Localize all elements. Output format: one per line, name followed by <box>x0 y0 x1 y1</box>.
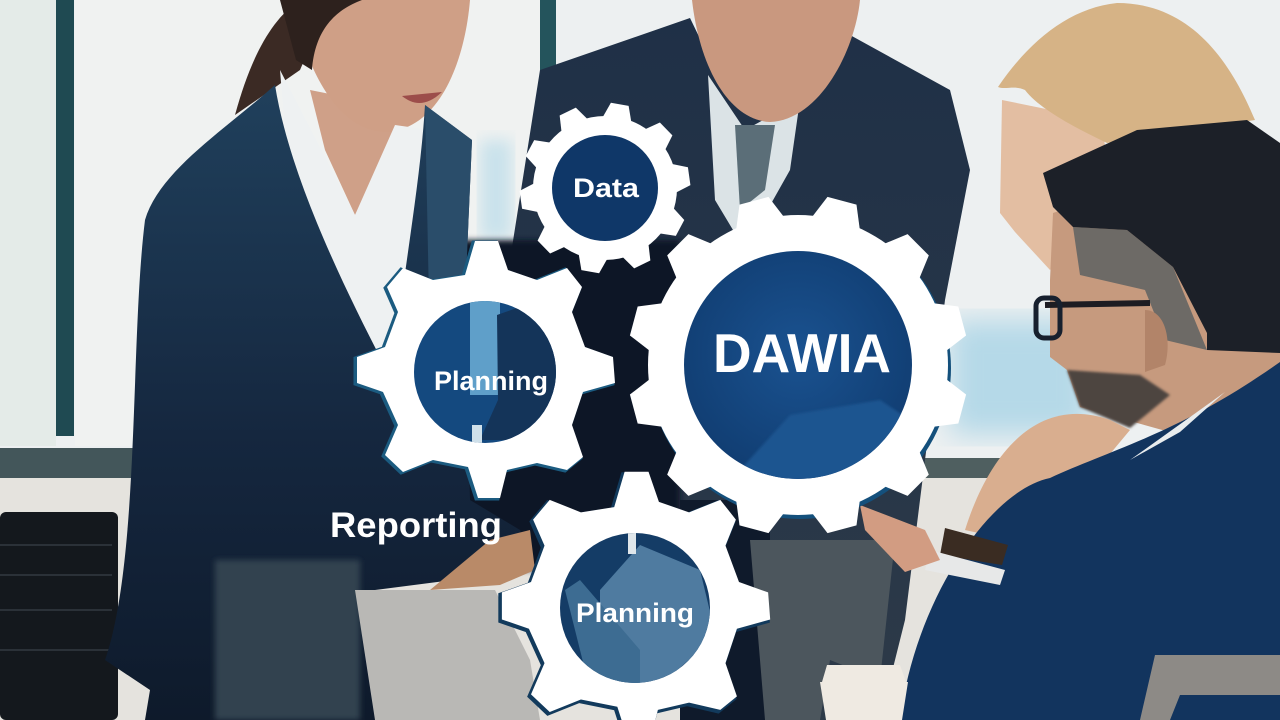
gear: large DAWIA <box>627 194 969 536</box>
laptop <box>355 590 540 720</box>
chair right <box>1140 655 1280 720</box>
person: woman on left <box>105 0 535 720</box>
gear: Planning (bottom) <box>500 472 770 720</box>
label: DAWIA: DAWIA <box>713 322 891 384</box>
label: Planning: Planning <box>576 598 694 628</box>
person: man in centre <box>460 0 970 720</box>
chair left <box>0 512 118 720</box>
gear: Planning (middle) <box>355 241 615 499</box>
person: blonde woman on right <box>998 3 1255 270</box>
coffee cup <box>820 665 908 720</box>
label: Planning: Planning <box>434 366 548 396</box>
person: man in front <box>860 120 1280 720</box>
label: Data: Data <box>573 173 640 203</box>
gear: Data <box>519 102 691 274</box>
label: Reporting: Reporting <box>330 506 502 545</box>
